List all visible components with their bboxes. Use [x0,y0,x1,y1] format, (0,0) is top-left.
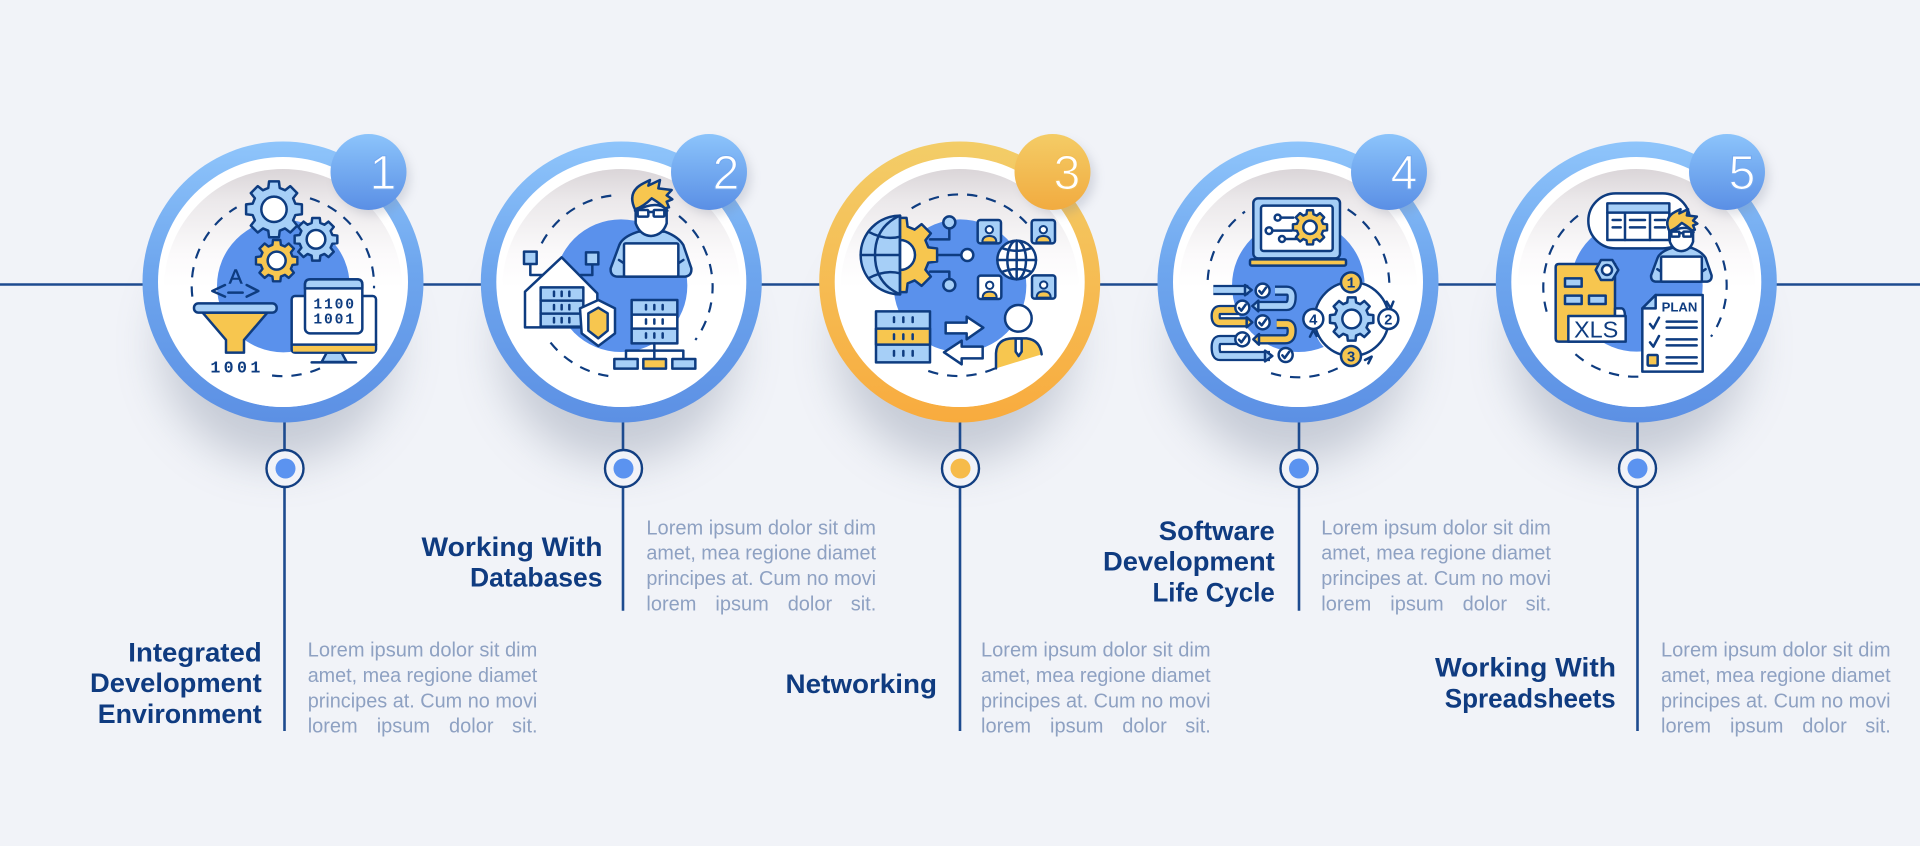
step 1: Integrated Development Environment [90,134,538,738]
number badge 4 [1351,134,1431,215]
body text 2: principes at. Cum no movi [646,568,876,590]
body text 4: ipsum [1390,594,1444,616]
body text 3: principes at. Cum no movi [981,690,1211,712]
heading 1: Development [90,668,262,698]
body text 5: Lorem ipsum dolor sit dim [1661,640,1891,662]
number badge 4: 4 [1391,147,1417,200]
body text 5: lorem [1661,716,1711,738]
body text 5 [1661,640,1891,738]
heading 4: Development [1103,547,1275,577]
heading 4: Software [1159,516,1275,546]
ring 1 [142,142,424,422]
body text 2: dolor [788,594,833,616]
number badge 5: 5 [1729,147,1755,200]
body text 2: amet, mea regione diamet [646,543,876,565]
body text 4: sit. [1526,594,1551,616]
icon: developer, secure building and database network [524,180,713,376]
heading 4: Life Cycle [1152,577,1275,607]
icon: laptop, process flow and four-step cycle: 3 [1347,350,1356,366]
icon: spreadsheet bubble, developer, XLS file and plan [1543,193,1727,377]
connector line 4 [1298,420,1300,611]
heading 1: Integrated [128,638,262,668]
body text 4: lorem [1321,594,1371,616]
heading 3: Networking [786,669,937,699]
icon: IDE gears, funnel and monitor: 1001 [313,312,354,328]
heading 1 [90,638,262,729]
icon: laptop, process flow and four-step cycle: 4 [1309,313,1318,329]
body text 4: principes at. Cum no movi [1321,568,1551,590]
marker dot 3 [942,450,979,487]
body text 5: principes at. Cum no movi [1661,690,1891,712]
body text 3: Lorem ipsum dolor sit dim [981,640,1211,662]
heading 5: Working With [1435,653,1616,683]
step 5: Working With Spreadsheets [1435,134,1891,738]
icon: spreadsheet bubble, developer, XLS file and plan: XLS [1574,316,1618,342]
marker dot 2 [605,450,642,487]
body text 5: ipsum [1730,716,1783,738]
body text 3: dolor [1122,716,1167,738]
number badge 3 [1014,134,1095,215]
icon: laptop, process flow and four-step cycle: 1 [1347,277,1356,293]
ring 5 [1496,142,1777,422]
marker dot 1 [266,450,304,487]
body text 5: dolor [1802,716,1847,738]
body text 5: sit. [1865,716,1891,738]
body text 3 [981,640,1211,738]
body text 2: Lorem ipsum dolor sit dim [646,517,876,539]
body text 4: dolor [1463,594,1507,616]
heading 2: Databases [470,563,602,593]
number badge 2 [671,134,751,215]
marker dot 4 [1280,450,1318,487]
icon: spreadsheet bubble, developer, XLS file and plan: PLAN [1662,301,1697,315]
body text 1: sit. [512,716,538,738]
number badge 1: 1 [370,147,396,200]
body text 5: amet, mea regione diamet [1661,665,1891,687]
number badge 3: 3 [1054,147,1080,200]
connector line 2 [622,420,624,611]
heading 1: Environment [98,699,262,729]
icon: IDE gears, funnel and monitor: A [229,265,243,288]
step 3: Networking [786,134,1211,738]
icon: IDE gears, funnel and monitor: 1100 [313,298,354,314]
icon: IDE gears, funnel and monitor [192,181,376,378]
connector line 5 [1636,420,1639,731]
heading 2: Working With [422,532,602,562]
body text 1: principes at. Cum no movi [308,690,537,712]
body text 2: ipsum [715,594,769,616]
number badge 2: 2 [713,147,739,200]
connector line 1 [283,420,286,731]
number badge 5 [1689,134,1769,215]
body text 1: Lorem ipsum dolor sit dim [308,640,537,662]
icon: global network, servers and user exchange [861,194,1055,376]
connector line 3 [959,420,961,731]
step 4: Software Development Life Cycle [1103,134,1551,616]
ring 2 [481,142,762,422]
body text 1: dolor [449,716,494,738]
heading 4 [1103,516,1275,607]
heading 5 [1435,653,1616,713]
body text 3: amet, mea regione diamet [981,665,1211,687]
icon: IDE gears, funnel and monitor: 1001 [210,359,260,378]
body text 2: lorem [646,594,696,616]
body text 1 [308,640,538,738]
body text 3: lorem [981,716,1031,738]
marker dot 5 [1619,450,1656,487]
body text 2 [646,517,876,616]
body text 1: ipsum [377,716,430,738]
ring 3 [819,142,1100,422]
body text 4: Lorem ipsum dolor sit dim [1321,517,1551,539]
horizontal timeline line [0,283,1920,286]
heading 2 [422,532,602,593]
body text 4 [1321,517,1551,616]
body text 2: sit. [851,594,876,616]
body text 1: lorem [308,716,358,738]
number badge 1 [330,134,410,215]
body text 3: ipsum [1050,716,1103,738]
icon: laptop, process flow and four-step cycle: 2 [1384,313,1393,329]
heading 5: Spreadsheets [1445,683,1616,713]
body text 4: amet, mea regione diamet [1321,543,1551,565]
step 2: Working With Databases [422,134,876,616]
body text 1: amet, mea regione diamet [308,665,538,687]
body text 3: sit. [1185,716,1211,738]
ring 4 [1158,142,1438,422]
icon: laptop, process flow and four-step cycle [1208,198,1398,377]
